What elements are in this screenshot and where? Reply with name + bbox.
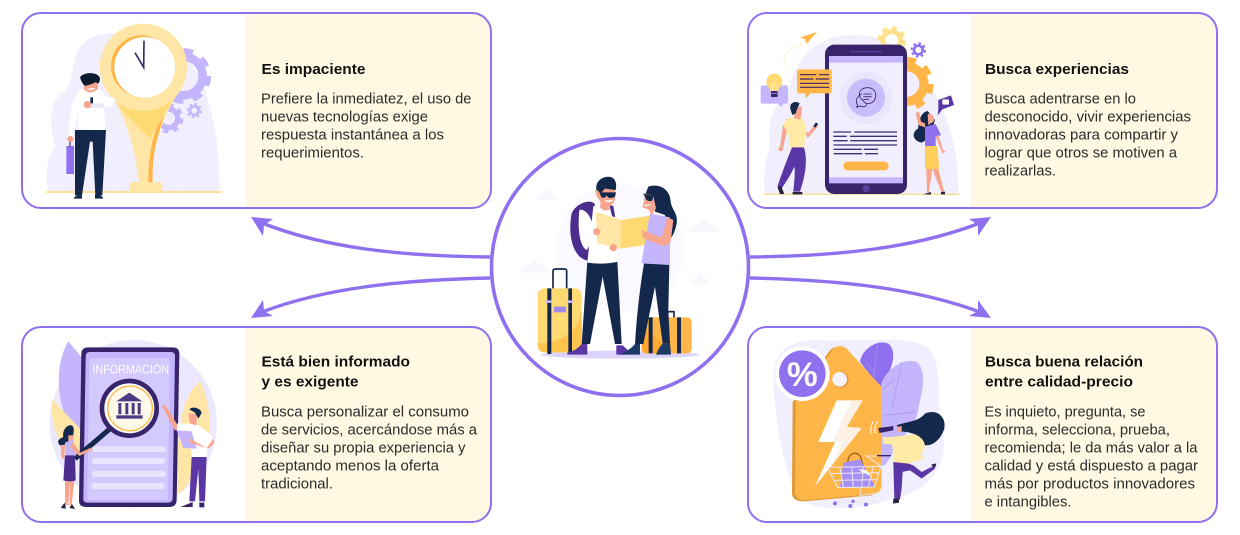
- text block: Busca personalizar el consumo: [261, 405, 469, 421]
- arrow: to bottom left panel: [251, 278, 490, 318]
- text block: nuevas tecnologías exige: [261, 109, 428, 125]
- woman: [620, 186, 677, 355]
- arrow: to top left panel: [251, 217, 490, 257]
- text block: e intangibles.: [984, 495, 1072, 511]
- text block: Prefiere la inmediatez, el uso de: [261, 91, 472, 107]
- man: [567, 177, 628, 355]
- illustration: price tag and shopper: [773, 340, 945, 508]
- text block: más por productos innovadores: [984, 477, 1195, 493]
- panel: Está bien informado: [22, 327, 491, 522]
- text block: recomienda; le da más valor a la: [984, 441, 1198, 457]
- arrow: to top right panel: [750, 217, 991, 257]
- text block: informa, selecciona, prueba,: [984, 423, 1170, 439]
- panel: Busca experiencias: [748, 13, 1217, 208]
- label: percent badge: %: [787, 356, 818, 394]
- heading: [985, 354, 1143, 391]
- arrow: to bottom right panel: [750, 278, 991, 318]
- illustration: man checking clock pin: [46, 24, 221, 199]
- text block: calidad y está dispuesto a pagar: [984, 459, 1198, 475]
- illustration: phone with magnifier: [50, 340, 217, 509]
- panel: Busca buena relación: [748, 327, 1217, 522]
- text block: [984, 405, 1198, 511]
- yellow suitcase: [538, 269, 582, 354]
- text block: realizarlas.: [984, 163, 1056, 179]
- text block: diseñar su propia experiencia y: [261, 441, 466, 457]
- text block: respuesta instantánea a los: [261, 127, 444, 143]
- shadow: [541, 351, 699, 359]
- text block: tradicional.: [261, 477, 333, 493]
- text block: [984, 91, 1191, 179]
- illustration: phone with two people: [761, 28, 960, 194]
- label: INFORMACIÓN: INFORMACIÓN: [92, 362, 169, 377]
- text block: [261, 405, 477, 493]
- text block: de servicios, acercándose más a: [261, 423, 477, 439]
- heading: Busca experiencias: [985, 61, 1129, 78]
- text block: Busca adentrarse en lo: [984, 91, 1136, 107]
- text block: requerimientos.: [261, 145, 364, 161]
- text block: Es inquieto, pregunta, se: [984, 405, 1146, 421]
- heading: Está bien informado: [262, 354, 410, 371]
- panel: Es impaciente: [22, 13, 491, 208]
- heading: Busca buena relación: [985, 354, 1143, 371]
- heading: entre calidad-precio: [985, 374, 1133, 391]
- heading: Es impaciente: [262, 61, 366, 78]
- orange suitcase: [642, 312, 692, 353]
- heading: y es exigente: [262, 374, 358, 391]
- text block: aceptando menos la oferta: [261, 459, 439, 475]
- heading: [262, 354, 410, 391]
- text block: lograr que otros se motiven a: [984, 145, 1177, 161]
- text block: desconocido, vivir experiencias: [984, 109, 1191, 125]
- text block: innovadoras para compartir y: [984, 127, 1179, 143]
- central circle: travellers reading a map: [492, 138, 748, 396]
- map: [593, 212, 650, 251]
- text block: [261, 91, 472, 161]
